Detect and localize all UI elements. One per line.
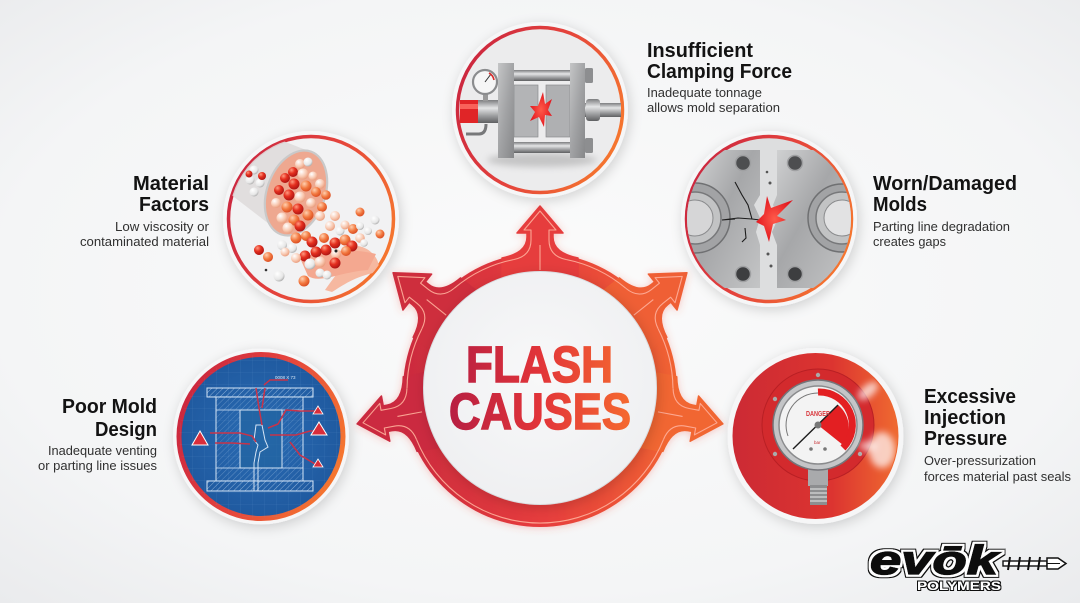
title: FLASH xyxy=(466,336,613,393)
heading and text: poor mold design: Inadequate venting xyxy=(48,444,157,458)
heading and text: excessive injection pressure: Pressure xyxy=(924,428,1007,450)
center disc xyxy=(424,272,656,504)
title: CAUSES xyxy=(449,383,631,440)
heading and text: worn damaged molds xyxy=(873,173,1017,249)
heading and text: excessive injection pressure xyxy=(924,386,1071,484)
icon: red burst xyxy=(530,92,552,127)
icon: extruder screw xyxy=(1003,557,1066,570)
heading and text: poor mold design: Design xyxy=(95,419,157,441)
heading and text: excessive injection pressure: Injection xyxy=(924,407,1006,429)
heading and text: material factors xyxy=(80,173,209,249)
logo: evok polymers xyxy=(870,537,1066,593)
heading and text: material factors: Factors xyxy=(139,194,209,216)
icon: spilled resin jar and beads xyxy=(232,142,384,292)
heading and text: insufficient clamping force: Insufficient xyxy=(647,40,753,62)
arrow: top xyxy=(502,206,578,280)
icon: pressure gauge: DANGER xyxy=(806,411,830,418)
icon: mold blueprint xyxy=(179,354,343,518)
heading and text: excessive injection pressure: Excessive xyxy=(924,386,1016,408)
panel: material factors xyxy=(223,128,399,307)
icon: clamping press xyxy=(460,63,621,167)
central ring with five arrows xyxy=(350,206,730,527)
arrow: upper right xyxy=(602,243,711,351)
heading and text: worn damaged molds: Parting line degradation xyxy=(873,220,1010,234)
heading and text: material factors: contaminated material xyxy=(80,235,209,249)
heading and text: insufficient clamping force: Inadequate tonnage xyxy=(647,86,762,100)
heading and text: insufficient clamping force: allows mold separation xyxy=(647,101,780,115)
heading and text: insufficient clamping force: Clamping Force xyxy=(647,61,792,83)
arrow: right xyxy=(641,373,730,461)
heading and text: worn damaged molds: Worn/Damaged xyxy=(873,173,1017,195)
heading and text: material factors: Low viscosity or xyxy=(115,220,209,234)
heading and text: insufficient clamping force xyxy=(647,40,792,115)
heading and text: worn damaged molds: Molds xyxy=(873,194,927,216)
icon: cracked mold plates xyxy=(687,150,851,288)
icon: red burst xyxy=(756,196,793,242)
panel: insufficient clamping force xyxy=(452,22,628,198)
heading and text: poor mold design: or parting line issues xyxy=(38,459,157,473)
heading and text: poor mold design xyxy=(38,396,157,473)
heading and text: material factors: Material xyxy=(133,173,209,195)
icon: mold blueprint: 0008 X 73 xyxy=(275,375,296,380)
heading and text: worn damaged molds: creates gaps xyxy=(873,235,946,249)
title xyxy=(449,336,631,440)
arrow: upper left xyxy=(369,243,478,351)
logo: evok polymers: evōk xyxy=(870,537,1001,583)
icon: pressure gauge xyxy=(762,369,895,505)
arrow: left xyxy=(350,373,439,461)
panel: worn damaged molds xyxy=(660,131,876,307)
logo: evok polymers: POLYMERS xyxy=(917,581,1001,593)
heading and text: poor mold design: Poor Mold xyxy=(62,396,157,418)
panel: poor mold design xyxy=(173,348,350,525)
icon: pressure gauge: bar xyxy=(814,440,821,445)
panel: excessive injection pressure xyxy=(728,348,904,524)
heading and text: excessive injection pressure: Over-pressurization xyxy=(924,454,1036,468)
heading and text: excessive injection pressure: forces material past seals xyxy=(924,470,1071,484)
